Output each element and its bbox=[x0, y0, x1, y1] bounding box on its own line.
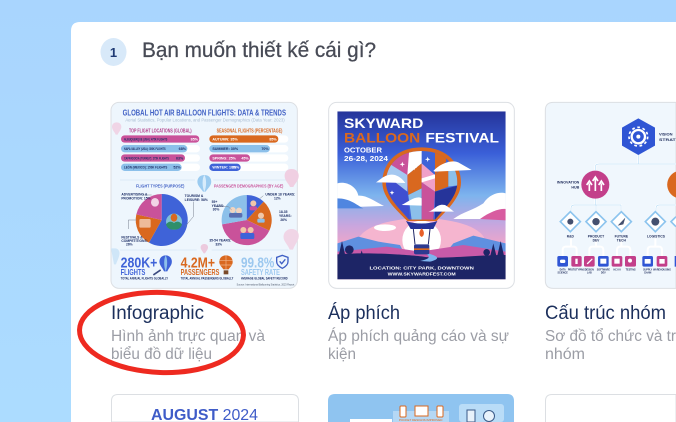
poster title: SKYWARD bbox=[344, 116, 423, 131]
seasonal flights bars: SEASONAL FLIGHTS (PERCENTAGE) bbox=[217, 128, 282, 134]
card label: poster: Áp phích quảng cáo và sự bbox=[328, 328, 509, 345]
foreground clouds bbox=[376, 161, 472, 212]
card: blank thumbnail bbox=[546, 394, 676, 422]
basket bbox=[414, 244, 429, 254]
vision hexagon: VISION bbox=[659, 132, 673, 137]
bottom team tiles: DATA bbox=[560, 268, 566, 271]
diamond labels: R&D bbox=[567, 234, 575, 238]
hot air balloon bbox=[382, 147, 461, 254]
seasonal flights bars: 45% bbox=[241, 156, 249, 160]
card: blue system diagram thumbnail bbox=[328, 394, 514, 422]
bottom team tiles: SOFTWARE bbox=[597, 268, 610, 271]
top flight locations bars: TOP FLIGHT LOCATIONS (GLOBAL) bbox=[129, 128, 192, 134]
stat: passengers bbox=[181, 255, 234, 280]
top flight locations bars bbox=[121, 128, 200, 171]
passenger demographics pie chart: 55+ bbox=[212, 200, 217, 204]
step number badge: 1 bbox=[110, 45, 117, 60]
bottom team tiles: LAB bbox=[587, 271, 592, 274]
card label: team structure bbox=[545, 303, 676, 363]
bottom team tiles: DESIGN bbox=[585, 269, 594, 271]
flight types pie chart: PROMOTION: 15% bbox=[121, 197, 151, 201]
stat: safety rate bbox=[241, 255, 288, 280]
flight types pie chart: 26% bbox=[126, 243, 133, 247]
bottom team tiles: DEV bbox=[601, 272, 606, 274]
card label: poster bbox=[328, 303, 509, 363]
seasonal flights bars bbox=[209, 128, 288, 171]
connector lines bbox=[563, 155, 676, 256]
background clouds bbox=[337, 183, 506, 231]
seasonal flights bars: 35% bbox=[232, 166, 240, 170]
top flight locations bars: CAPPADOCIA (TURKEY): 275K FLIGHTS bbox=[124, 156, 169, 160]
passenger demographics pie chart: 33% bbox=[215, 243, 222, 247]
card label: team structure: Sơ đồ tổ chức và tr bbox=[545, 328, 676, 345]
stat: passengers: 4.2M+ bbox=[181, 255, 215, 271]
card label: poster: Áp phích bbox=[328, 303, 400, 324]
operations hub bbox=[667, 172, 676, 198]
seasonal flights bars: WINTER: 10% bbox=[212, 166, 237, 170]
top flight locations bars: 52% bbox=[173, 166, 181, 170]
trees bbox=[339, 241, 504, 256]
passenger demographics pie chart: YEARS: bbox=[212, 204, 224, 208]
bottom team tiles: HCI UI bbox=[613, 269, 621, 271]
card label: infographic: Infographic bbox=[111, 303, 204, 324]
bottom team tiles: PROTOTYPING bbox=[568, 269, 585, 271]
passenger demographics pie chart bbox=[209, 193, 295, 247]
diamond labels: TECH bbox=[617, 238, 626, 242]
bottom team tiles: CHAIN bbox=[644, 271, 652, 274]
diamond labels: FUTURE bbox=[615, 234, 629, 238]
center balloon divider icon bbox=[111, 122, 299, 264]
passenger demographics pie chart: YEARS: bbox=[279, 214, 292, 218]
stat: passengers: TOTAL ANNUAL PASSENGERS GLOBALLY bbox=[181, 276, 234, 280]
vision hexagon: STRAT bbox=[659, 137, 676, 142]
top flight locations bars: ALBUQUERQUE (USA): 475K FLIGHTS bbox=[124, 137, 168, 141]
innovation hub: INNOVATION bbox=[557, 181, 580, 185]
card: infographic thumbnail bbox=[111, 102, 299, 288]
card label: team structure: nhóm bbox=[545, 346, 585, 363]
vision hexagon bbox=[622, 118, 676, 155]
card label: infographic bbox=[111, 303, 265, 363]
bottom team tiles: TESTING bbox=[626, 269, 636, 271]
flight types pie chart: TOURISM & bbox=[185, 194, 204, 198]
flight types pie chart: LEISURE: 58% bbox=[185, 198, 208, 202]
flight types pie chart: ADVERTISING & bbox=[121, 193, 148, 197]
poster title bbox=[344, 118, 498, 142]
stat: flights: 280K+ bbox=[121, 255, 157, 271]
seasonal flights bars: 85% bbox=[269, 137, 277, 141]
innovation hub: HUB bbox=[571, 185, 580, 189]
poster date: 26-28, 2024 bbox=[344, 156, 388, 163]
seasonal flights bars: SUMMER: 30% bbox=[212, 147, 239, 151]
seasonal flights bars: AUTUMN: 35% bbox=[212, 137, 238, 141]
stat: flights: TOTAL ANNUAL FLIGHTS GLOBALLY bbox=[121, 276, 169, 280]
card label: team structure: Cấu trúc nhóm bbox=[545, 303, 666, 324]
top flight locations bars: 85% bbox=[191, 137, 199, 141]
diamond labels: PRODUCT bbox=[588, 234, 604, 238]
diamond labels: DEV bbox=[593, 238, 600, 242]
poster location: WWW.SKYWARDFEST.COM bbox=[388, 272, 456, 277]
sun glow bbox=[402, 221, 441, 251]
top flight locations bars: LEÓN (MEXICO): 150K FLIGHTS bbox=[124, 165, 168, 170]
poster location bbox=[370, 266, 474, 276]
card: team structure thumbnail bbox=[545, 102, 676, 288]
flight types pie chart: COMPETITIONS: bbox=[121, 239, 148, 243]
seasonal flights bars: SPRING: 25% bbox=[212, 156, 237, 160]
infographic subtitle: Aerial Statistics, Popular Locations, and Passenger Demographics (Data Year: 2023) bbox=[125, 118, 285, 123]
poster date bbox=[344, 148, 388, 163]
card label: poster: kiện bbox=[328, 346, 356, 363]
stat: safety rate: 99.8% bbox=[241, 255, 274, 271]
poster date: OCTOBER bbox=[344, 148, 382, 155]
step number badge bbox=[100, 38, 126, 66]
stat: safety rate: SAFETY RATE bbox=[241, 267, 280, 277]
flight types pie chart bbox=[121, 193, 208, 247]
bottom team tiles: SUPPLY bbox=[643, 269, 653, 271]
bottom team tiles bbox=[557, 256, 676, 274]
diamond labels bbox=[567, 234, 666, 242]
passenger demographics pie chart: 18-35 bbox=[279, 210, 288, 214]
source note: Source: International Ballooning Statistics, 2023 Report bbox=[237, 282, 295, 286]
passenger demographics pie chart: 12% bbox=[274, 197, 281, 201]
horizon glow bbox=[360, 219, 484, 250]
passenger demographics pie chart: 30% bbox=[213, 207, 219, 211]
stat: flights bbox=[121, 255, 172, 280]
passenger demographics heading: PASSENGER DEMOGRAPHICS (BY AGE) bbox=[214, 184, 284, 190]
passenger demographics pie chart: UNDER 18 YEARS: bbox=[265, 193, 295, 197]
passenger demographics pie chart: 26% bbox=[280, 218, 287, 222]
heading: Bạn muốn thiết kế cái gì? bbox=[142, 39, 376, 62]
innovation hub bbox=[557, 171, 609, 199]
infographic title: GLOBAL HOT AIR BALLOON FLIGHTS: DATA & TRENDS bbox=[123, 107, 286, 117]
bottom team tiles: WAREHOUSING bbox=[653, 268, 671, 271]
card: blue system diagram thumbnail: POCKET DESIGNS IMPROVED bbox=[399, 418, 443, 422]
bottom team tiles: SCIENCE bbox=[557, 272, 568, 274]
passenger demographics pie chart: 35-54 YEARS: bbox=[209, 239, 231, 243]
stat: safety rate: AVERAGE GLOBAL SAFETY RECORD bbox=[241, 276, 288, 280]
top flight locations bars: 68% bbox=[179, 147, 187, 151]
flight types pie chart: FESTIVALS & bbox=[121, 235, 143, 239]
mountains bbox=[337, 236, 506, 258]
top flight locations bars: NAPA VALLEY (USA): 350K FLIGHTS bbox=[124, 147, 166, 151]
card: calendar thumbnail bbox=[112, 394, 298, 422]
stat: passengers: PASSENGERS bbox=[181, 267, 219, 277]
second level diamonds bbox=[560, 212, 676, 232]
red hand-drawn circle annotation bbox=[78, 290, 245, 375]
card label: infographic: Hình ảnh trực quan và bbox=[111, 328, 265, 345]
poster title: FESTIVAL bbox=[425, 131, 499, 146]
stat: flights: FLIGHTS bbox=[121, 267, 145, 277]
seasonal flights bars: 70% bbox=[261, 147, 269, 151]
card label: infographic: biểu đồ dữ liệu bbox=[111, 346, 212, 363]
card: poster thumbnail bbox=[329, 102, 514, 288]
top flight locations bars: 63% bbox=[176, 156, 184, 160]
poster location: LOCATION: CITY PARK, DOWNTOWN bbox=[369, 266, 475, 271]
flight types heading: FLIGHT TYPES (PURPOSE) bbox=[136, 184, 185, 190]
diamond labels: LOGISTICS bbox=[647, 234, 666, 238]
balloon skirt bbox=[406, 221, 437, 229]
poster title: BALLOON bbox=[344, 131, 420, 146]
